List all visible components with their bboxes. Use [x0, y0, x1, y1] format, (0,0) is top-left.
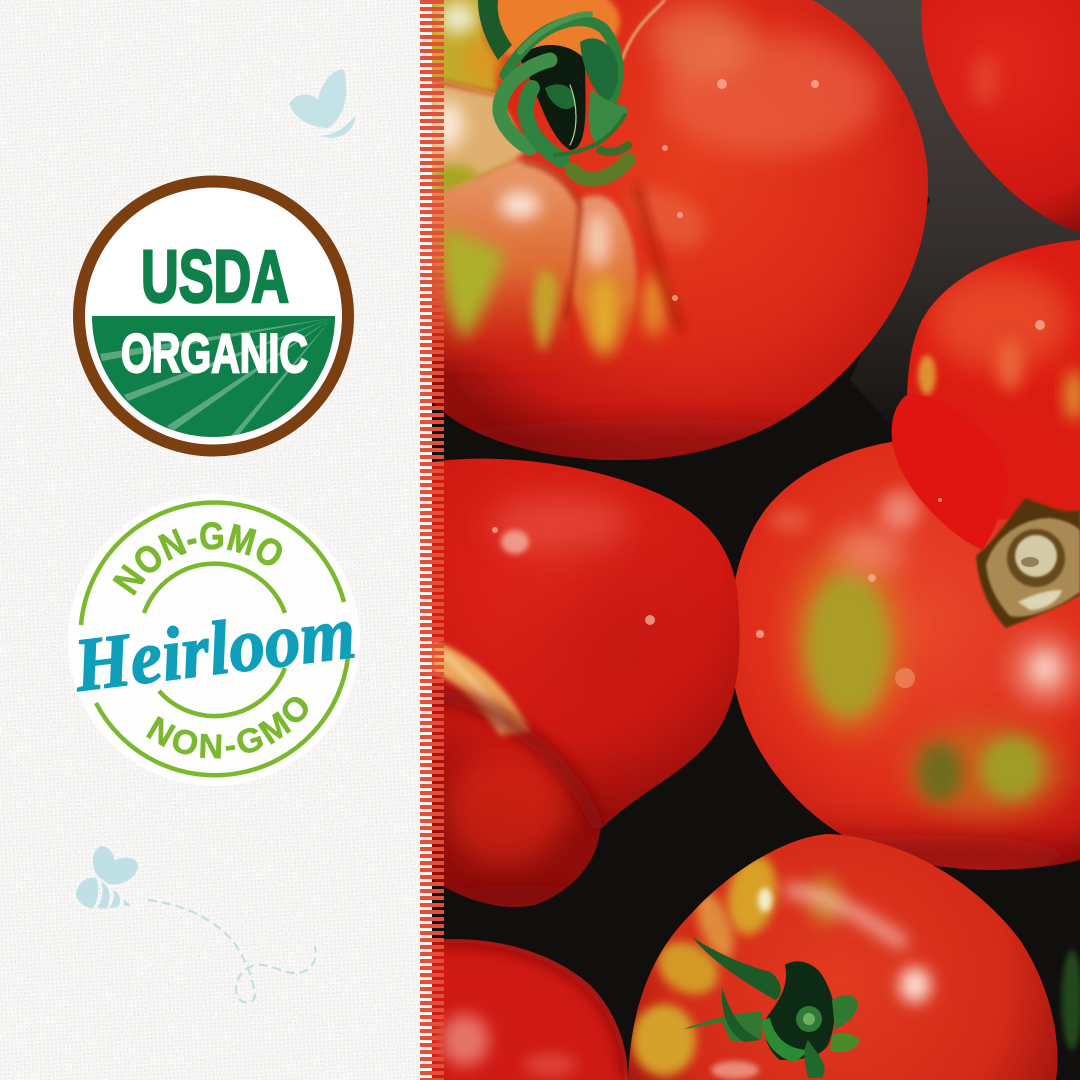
water droplets [492, 79, 1045, 688]
tomato: large right [720, 235, 1080, 885]
tomato: bottom centre [620, 825, 1065, 1080]
USDA wordmark: USDA [141, 235, 289, 318]
tomato: large top [425, 0, 942, 471]
tomato fold flap [892, 395, 1008, 550]
NON-GMO top text: NON-GMO [112, 522, 282, 596]
panel: tomato photograph [425, 0, 1080, 1080]
panel: linen fabric background [0, 0, 432, 1080]
tomato: middle left [430, 450, 752, 920]
decorative stripe border [420, 0, 444, 1080]
icon: bee with dashed flight path [76, 845, 316, 1003]
Heirloom script: Heirloom [69, 590, 360, 708]
tomato: top right [910, 0, 1080, 240]
field rays [100, 318, 332, 436]
badge: USDA Organic [79, 182, 348, 450]
icon: bottom tomato green stem [683, 937, 860, 1078]
ORGANIC wordmark: ORGANIC [121, 322, 308, 384]
badge: Non-GMO Heirloom [68, 494, 360, 786]
green field [92, 316, 335, 437]
tomato: bottom left [432, 939, 628, 1080]
icon: butterfly [289, 69, 355, 138]
outer ring arcs [81, 502, 348, 775]
icon: top tomato green stem [478, 0, 628, 179]
NON-GMO bottom text: NON-GMO [146, 696, 308, 758]
icon: calyx scar on right tomato [976, 498, 1080, 628]
